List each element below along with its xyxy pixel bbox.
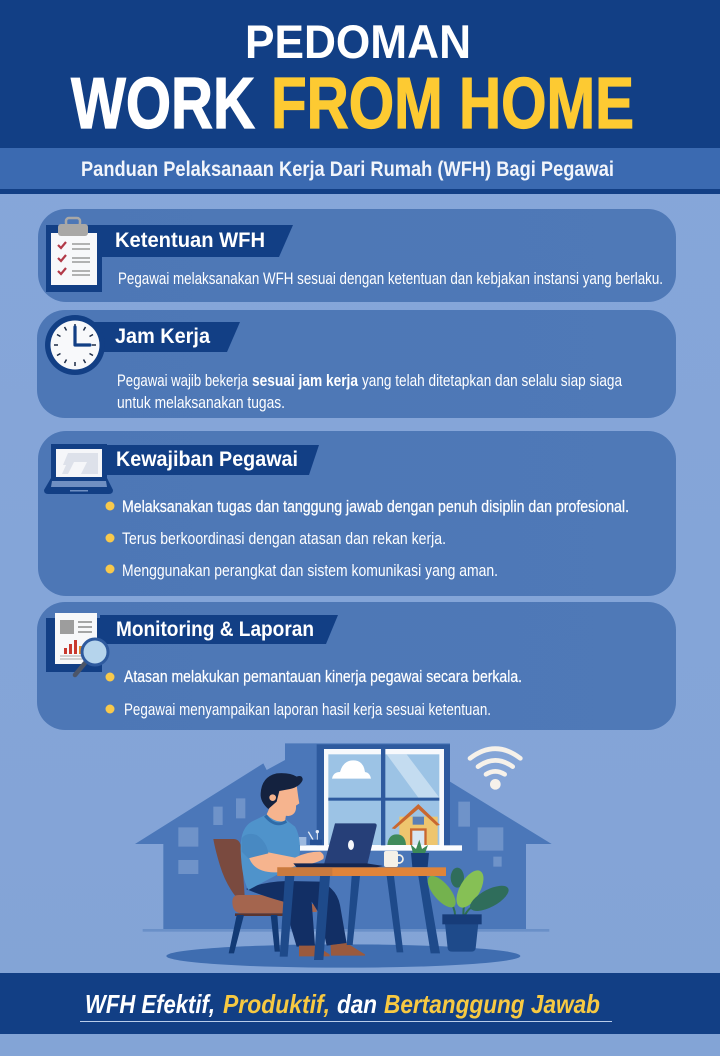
footer slogan: Produktif, <box>223 989 330 1019</box>
forearm and hand <box>248 852 324 872</box>
title line: PEDOMAN: PEDOMAN <box>245 15 471 68</box>
body text: sesuai jam kerja <box>252 372 359 390</box>
subtitle band: Panduan Pelaksanaan Kerja Dari Rumah (WFH) Bagi Pegawai <box>81 158 614 181</box>
torso <box>241 814 300 890</box>
heading: Ketentuan WFH <box>115 229 265 252</box>
icon: report and magnifier <box>55 613 108 675</box>
panel: Kewajiban Pegawai <box>38 431 676 596</box>
laptop <box>293 823 383 867</box>
heading ribbon <box>46 615 338 672</box>
wifi icon <box>470 749 520 787</box>
chair <box>213 839 317 953</box>
sleeve <box>242 834 268 858</box>
bullet list: Pegawai menyampaikan laporan hasil kerja sesuai ketentuan. <box>124 701 491 719</box>
person <box>241 773 365 956</box>
small potted plant <box>411 840 429 867</box>
coffee mug <box>384 851 403 867</box>
footer slogan: WFH Efektif, <box>85 989 215 1019</box>
icon: laptop <box>44 444 113 494</box>
footer slogan: dan <box>337 989 377 1019</box>
icon: clipboard <box>51 218 97 285</box>
footer slogan: Bertanggung Jawab <box>384 989 600 1019</box>
collar <box>264 814 287 825</box>
ear <box>269 794 276 801</box>
footer slogan <box>85 989 600 1019</box>
bullet list: Melaksanakan tugas dan tanggung jawab dengan penuh disiplin dan profesional. <box>122 498 629 516</box>
shoes <box>299 943 365 956</box>
panel: Jam Kerja <box>37 310 676 418</box>
bullet list <box>106 668 522 719</box>
heading: Monitoring & Laporan <box>116 618 314 641</box>
title line: WORK: WORK <box>71 64 255 144</box>
body text: untuk melaksanakan tugas. <box>117 394 285 412</box>
body text: yang telah ditetapkan dan selalu siap siaga <box>362 372 623 390</box>
large potted plant <box>423 866 512 952</box>
floor shadow <box>166 944 520 968</box>
heading: Kewajiban Pegawai <box>116 448 298 471</box>
bullet list: Atasan melakukan pemantauan kinerja pegawai secara berkala. <box>124 668 522 686</box>
neck <box>267 807 287 821</box>
trousers <box>246 881 347 947</box>
heading: Jam Kerja <box>115 325 210 348</box>
bullet list: Menggunakan perangkat dan sistem komunikasi yang aman. <box>122 562 498 580</box>
header: title block <box>0 0 720 148</box>
bullet list: Terus berkoordinasi dengan atasan dan rekan kerja. <box>122 530 446 548</box>
panel: Monitoring & Laporan <box>37 602 676 730</box>
heading ribbon <box>90 322 240 352</box>
footer band <box>0 973 720 1034</box>
hair <box>261 773 303 809</box>
desk items on sill <box>299 830 322 845</box>
heading ribbon <box>51 445 319 475</box>
subtitle band <box>0 148 720 194</box>
window <box>300 744 462 851</box>
heading ribbon <box>46 225 293 292</box>
panel: Ketentuan WFH <box>38 209 676 302</box>
table <box>277 867 446 960</box>
icon: clock <box>45 315 105 375</box>
illustration: working from home scene <box>135 743 552 968</box>
bullet list <box>106 498 629 580</box>
house silhouette background <box>135 743 552 932</box>
title line: FROM HOME: FROM HOME <box>271 64 634 144</box>
face <box>270 785 299 816</box>
house in window <box>387 804 440 845</box>
body text: Pegawai wajib bekerja <box>117 372 249 390</box>
body text <box>117 372 623 412</box>
